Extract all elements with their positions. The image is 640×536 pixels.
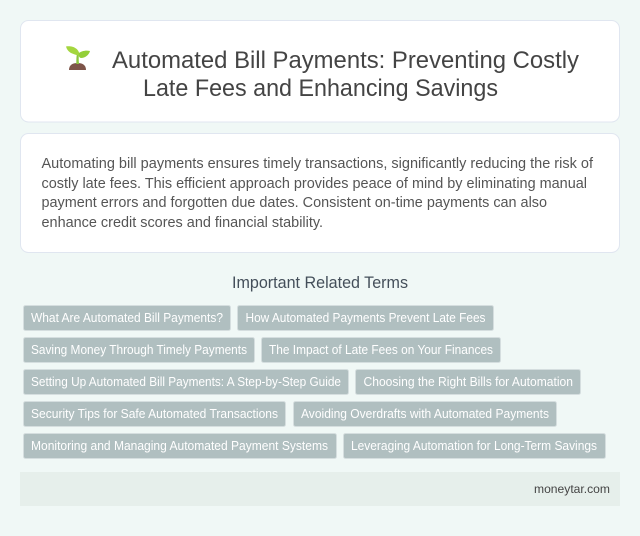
chip: Avoiding Overdrafts with Automated Payments [301,407,549,421]
summary paragraph: enhance credit scores and financial stability. [42,215,323,231]
chip [356,370,580,394]
chip: Monitoring and Managing Automated Payment Systems [31,439,328,453]
chip [24,338,254,362]
chip [24,306,230,330]
related terms chips [24,306,606,458]
chip: Setting Up Automated Bill Payments: A Step-by-Step Guide [31,375,341,389]
summary paragraph [42,156,594,231]
icon: sprout [66,46,90,70]
heading: related terms: Important Related Terms [232,274,408,292]
title line 1: Automated Bill Payments: Preventing Costly [112,47,580,74]
title line 2: Late Fees and Enhancing Savings [143,75,498,102]
summary paragraph: costly late fees. This efficient approach provides peace of mind by eliminating manual [42,176,587,192]
summary paragraph: Automating bill payments ensures timely transactions, significantly reducing the risk of [42,156,594,172]
chip [24,370,348,394]
chip: How Automated Payments Prevent Late Fees [246,311,486,325]
chip [238,306,494,330]
chip: The Impact of Late Fees on Your Finances [269,343,493,357]
chip [24,402,286,426]
chip: What Are Automated Bill Payments? [31,311,223,325]
footer bar [20,472,620,506]
chip: Security Tips for Safe Automated Transactions [31,407,278,421]
summary paragraph: payment errors and forgotten due dates. Consistent on-time payments can also [42,195,547,211]
panel: summary card [20,134,620,252]
panel: title card [20,20,620,122]
chip [344,434,606,458]
chip: Leveraging Automation for Long-Term Savings [351,439,597,453]
chip: Choosing the Right Bills for Automation [364,375,573,389]
chip: Saving Money Through Timely Payments [31,343,247,357]
chip [294,402,556,426]
footer source: moneytar.com [534,482,610,496]
chip [24,434,336,458]
chip [262,338,500,362]
